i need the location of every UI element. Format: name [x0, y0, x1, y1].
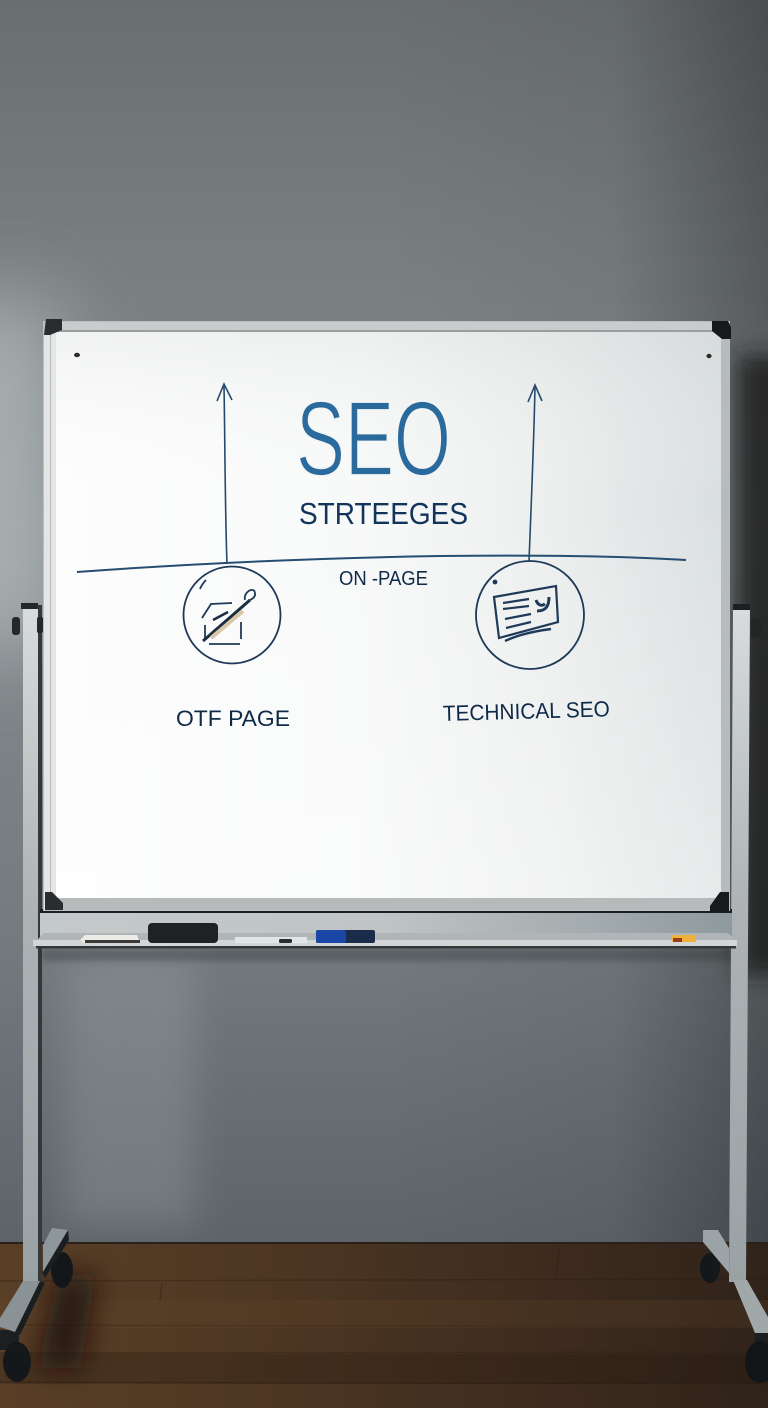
house outline: [202, 603, 241, 644]
document card: [494, 586, 558, 638]
left rear foot: [42, 1228, 69, 1278]
right up arrow: [528, 385, 542, 561]
frame corners: [44, 319, 731, 912]
whiteboard surface: [56, 332, 721, 898]
marker tray: [33, 913, 737, 948]
whiteboard frame: [43, 321, 730, 911]
left stand: [0, 603, 73, 1382]
subtitle: strategies: STRTEEGES: [299, 496, 468, 531]
right front foot: [733, 1280, 768, 1346]
right front wheel: [745, 1341, 768, 1383]
label: technical seo: TECHNICAL SEO: [442, 696, 610, 726]
right stand: [700, 604, 768, 1383]
eraser: [148, 923, 218, 943]
left up arrow: [217, 384, 232, 564]
left front wheel: [3, 1342, 31, 1382]
right rear foot: [703, 1230, 729, 1273]
left front foot: [0, 1281, 45, 1350]
label: on-page: ON -PAGE: [339, 568, 428, 590]
right post: [729, 607, 750, 1282]
right post cap and knob: [733, 604, 750, 610]
left post: [23, 605, 38, 1282]
title: SEO: SEO: [296, 380, 451, 498]
pencil: [203, 600, 250, 641]
mounting dots: [74, 353, 712, 358]
label: off-page: OTF PAGE: [176, 706, 290, 731]
left post cap and knob: [21, 603, 38, 609]
icon: off-page circle: [184, 566, 280, 664]
horizontal timeline line: [77, 556, 686, 572]
blue marker: [316, 930, 375, 943]
yellow marker: [672, 935, 696, 942]
board drop shadow: [40, 909, 732, 914]
left rear wheel: [51, 1252, 73, 1288]
paper scraps on tray: [235, 937, 307, 943]
right rear wheel: [700, 1253, 720, 1283]
white cloth on tray: [80, 935, 140, 943]
wooden floor: [0, 1242, 768, 1408]
icon: technical seo circle: [476, 561, 584, 669]
